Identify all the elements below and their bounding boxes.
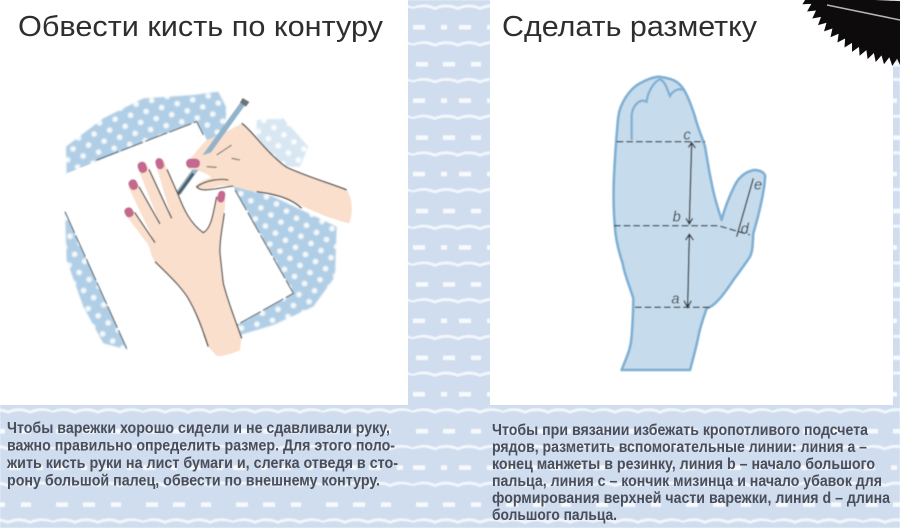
text block: trace instructions: жить кисть руки на лист бумаги и, слегка отведя в сто- [6,455,398,472]
traced hand [123,157,242,356]
mitten diagram: d [741,221,750,237]
text block: trace instructions: Чтобы варежки хорошо сидели и не сдавливали руку, [7,420,390,437]
panel background [490,0,893,405]
mitten diagram: e [754,177,762,193]
mitten shape [614,77,765,370]
heading: make the markings: Сделать разметку [502,11,758,43]
pencil [178,98,249,194]
illustration: hands tracing on paper [65,92,352,356]
mitten diagram: b [673,209,681,225]
text block: trace instructions: рону большой палец, обвести по внешнему контуру. [7,472,380,490]
text block: marking instructions: большого пальца. [492,507,617,524]
text block: trace instructions [6,420,398,490]
panel: make the markings [490,0,893,405]
dotted blue backdrop [65,92,337,350]
panel background [0,0,408,405]
panel: trace the hand [0,0,408,405]
mitten diagram [614,77,765,370]
line labels: c [683,127,691,143]
writing hand [178,98,352,223]
arrows [684,143,753,307]
heading: trace the hand: Обвести кисть по контуру [18,11,384,43]
sheet of paper [65,122,293,350]
text block: trace instructions: важно правильно определить размер. Для этого поло- [7,438,395,454]
dashed measuring lines [614,142,750,307]
text block: marking instructions [492,422,890,524]
mitten diagram: a [671,291,679,307]
index finger over pencil [186,143,240,170]
fingernails [123,157,226,219]
finger contour [632,79,685,140]
black starburst badge [798,0,900,67]
